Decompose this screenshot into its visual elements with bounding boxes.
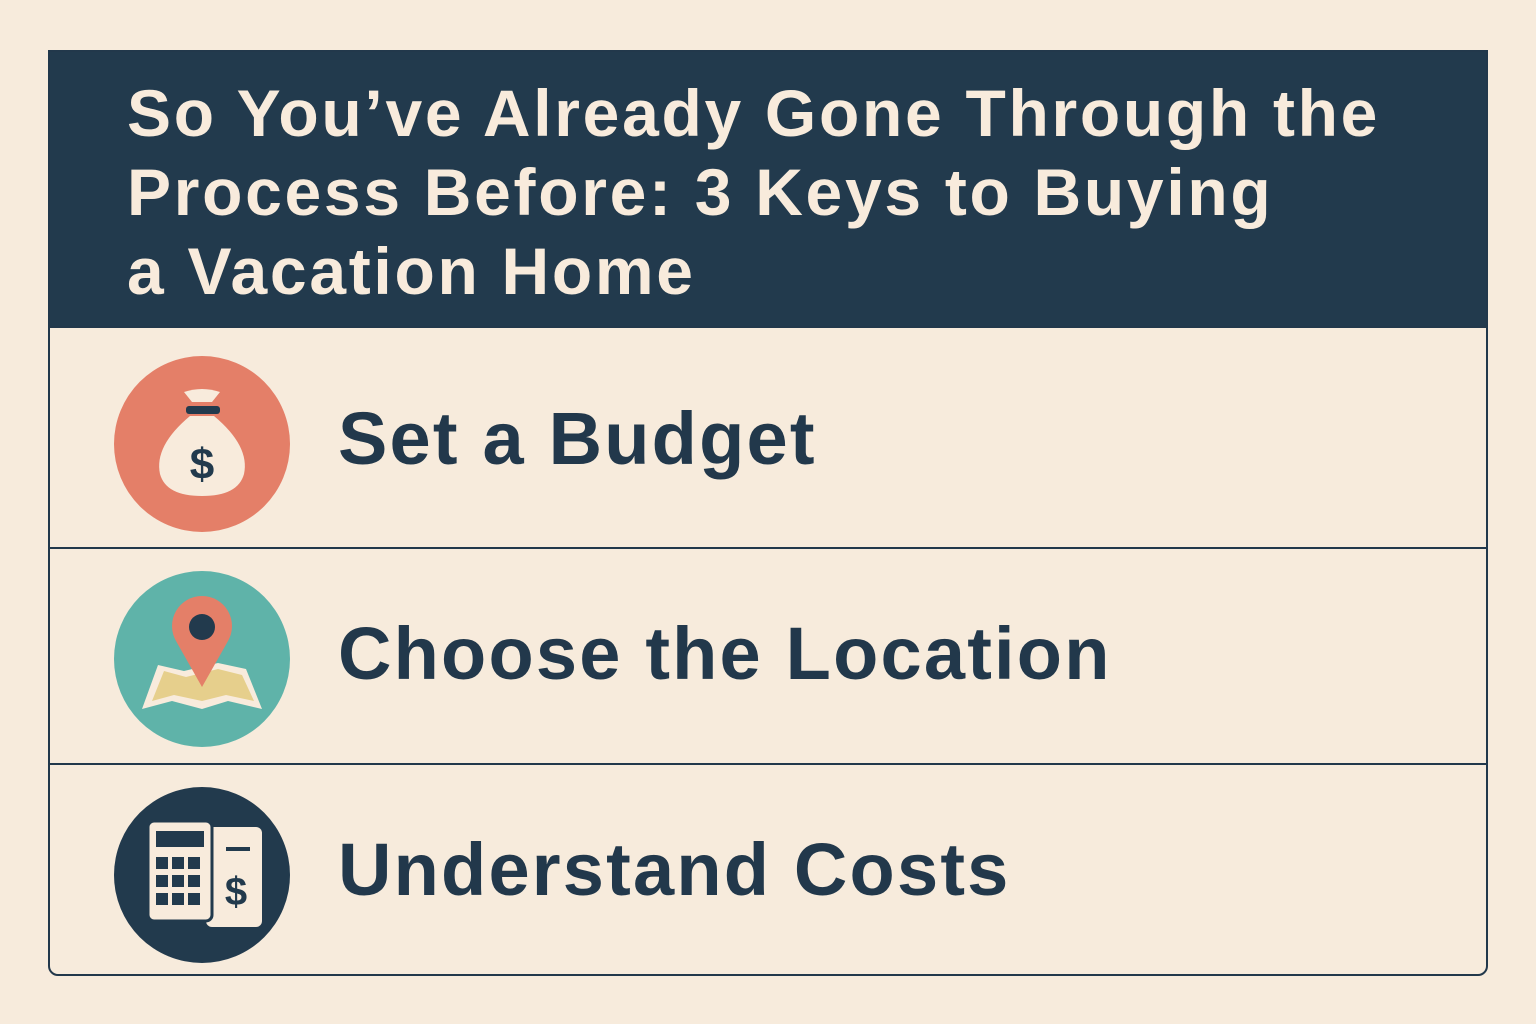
header banner (50, 52, 1486, 326)
title: a Vacation Home (127, 234, 696, 308)
icon: calculator: $ (225, 870, 247, 914)
label: choose the location: Choose the Location (338, 612, 1112, 695)
label: understand costs: Understand Costs (338, 828, 1011, 911)
row: understand costs (50, 763, 1486, 976)
label: set a budget: Set a Budget (338, 397, 817, 480)
row: set a budget (50, 326, 1486, 549)
title (127, 76, 1380, 308)
icon: calculator (114, 787, 290, 963)
icon: money bag (114, 356, 290, 532)
title: So You’ve Already Gone Through the (127, 76, 1380, 150)
title: Process Before: 3 Keys to Buying (127, 155, 1273, 229)
icon: map pin (114, 571, 290, 747)
row: choose the location (50, 547, 1486, 763)
icon: money bag: $ (190, 440, 214, 489)
